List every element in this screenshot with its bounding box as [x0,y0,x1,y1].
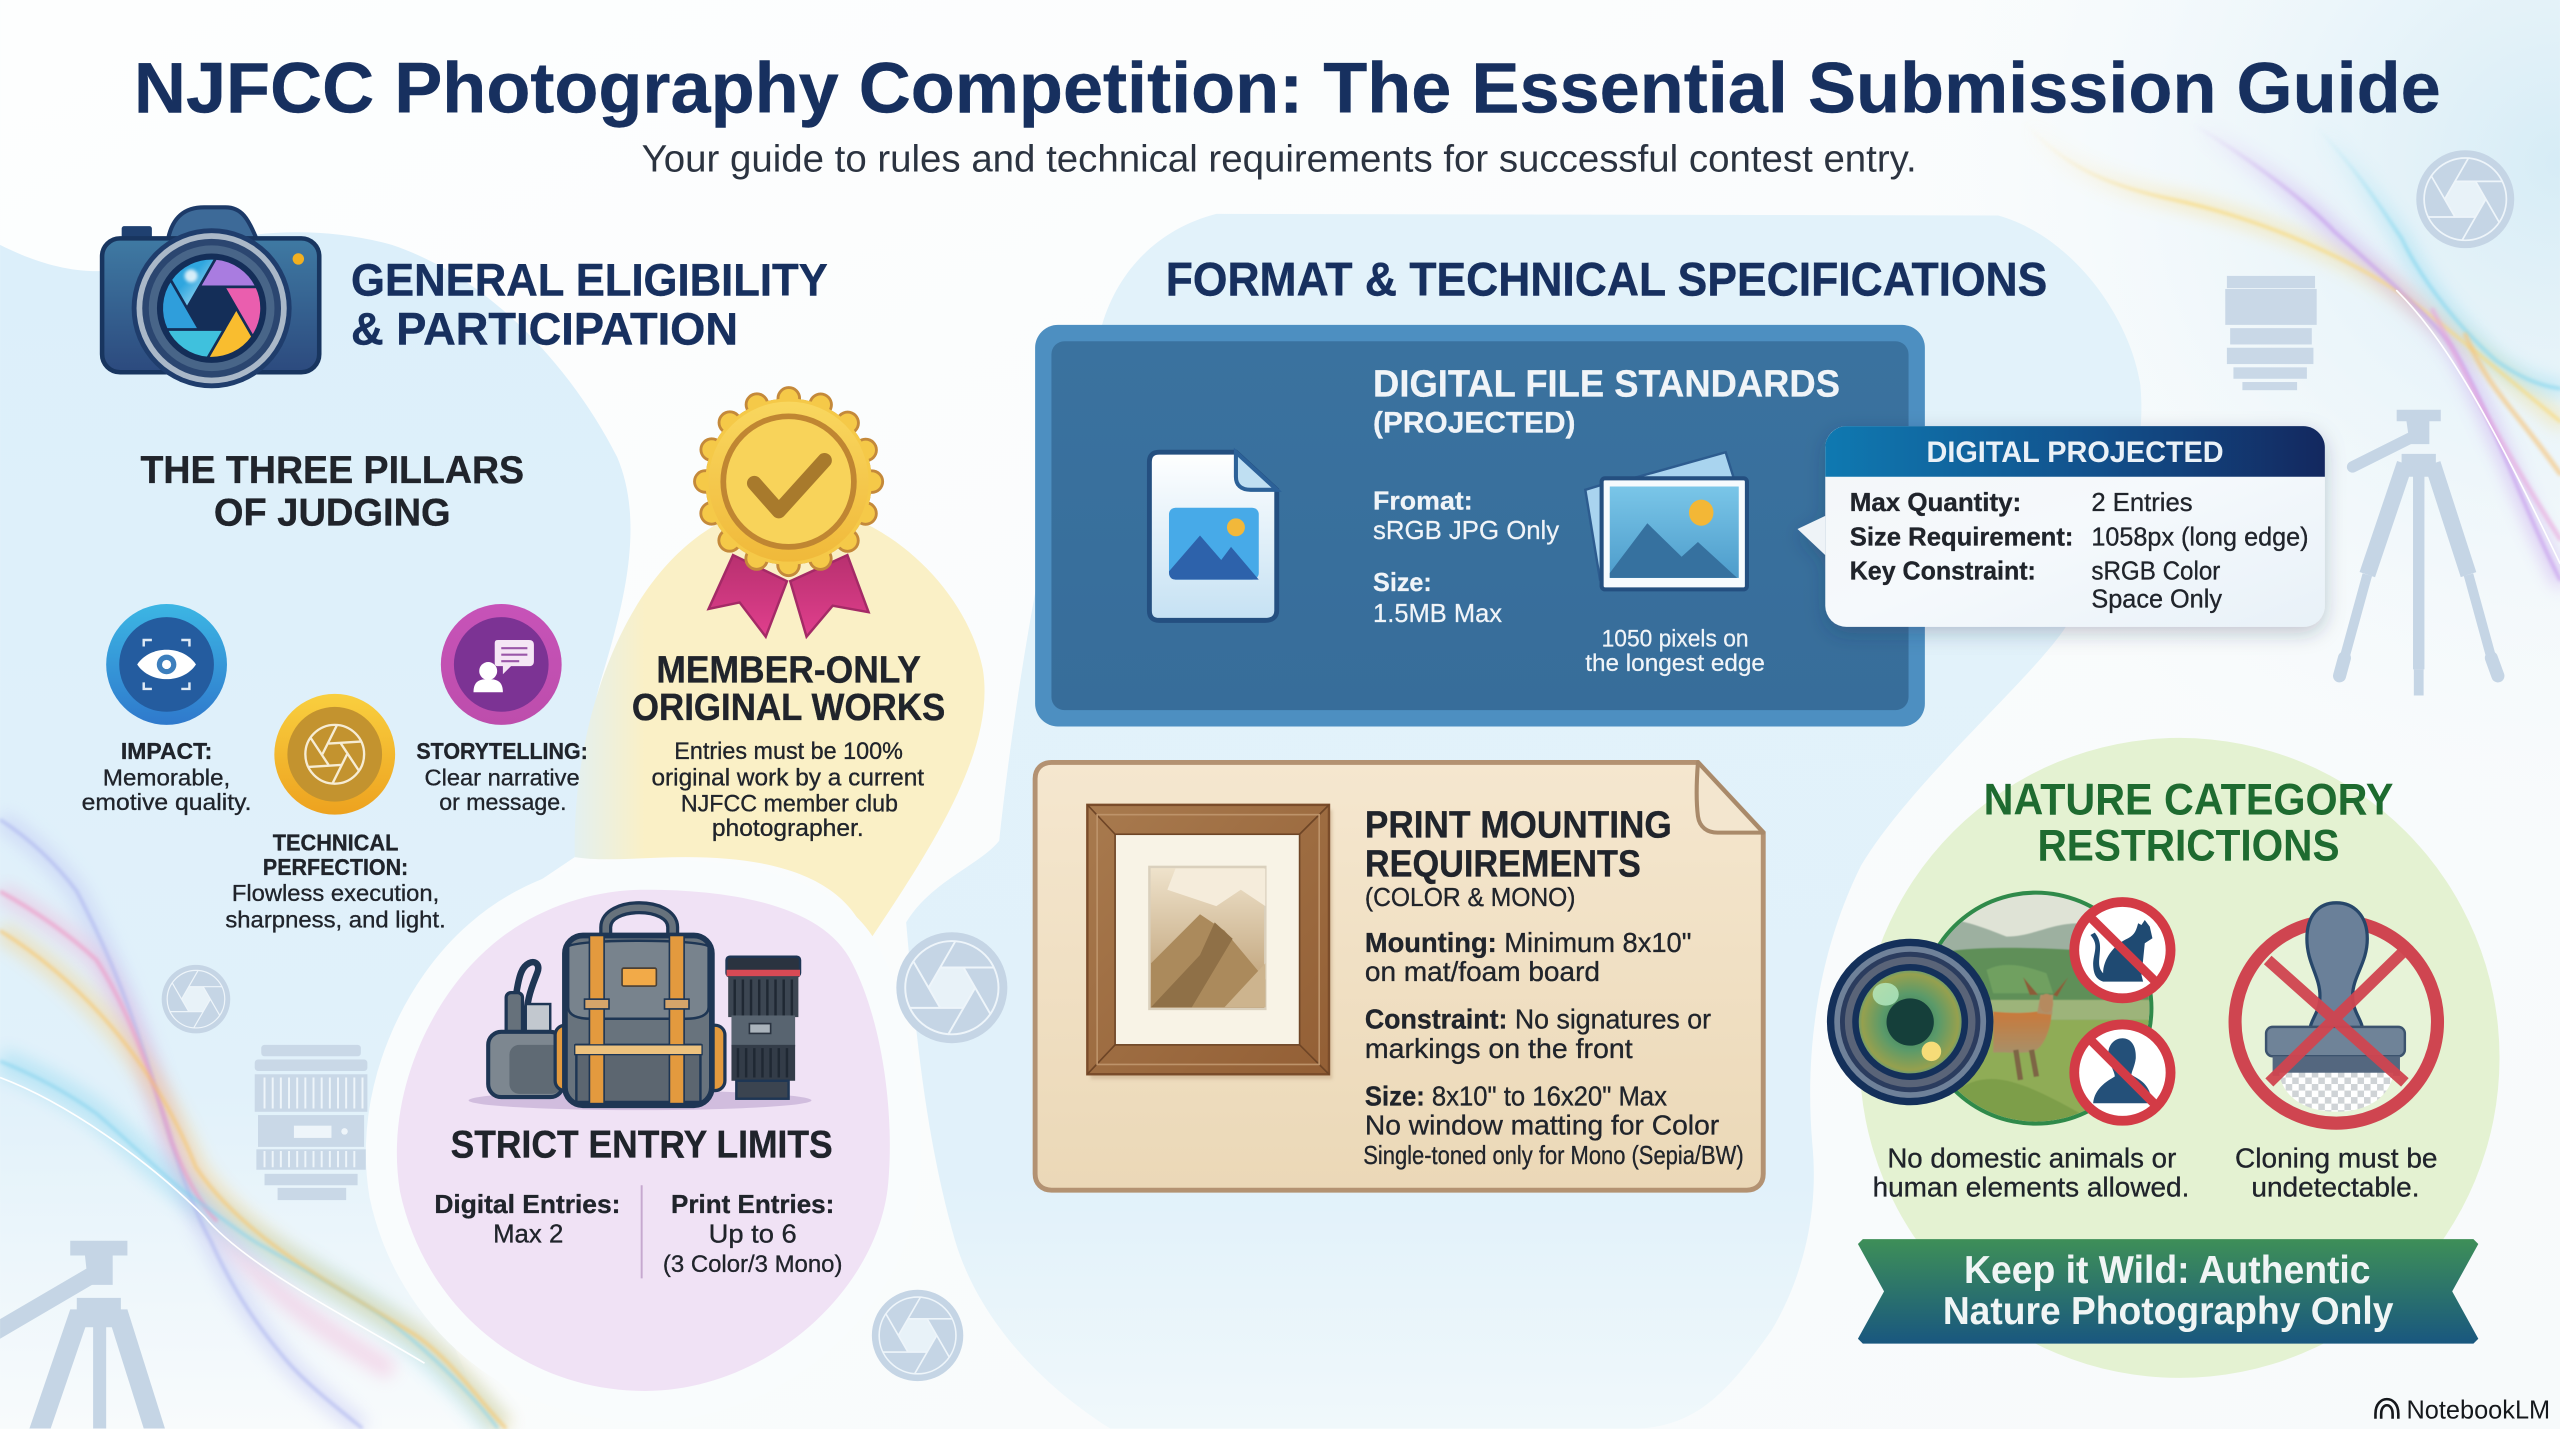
text: technical perfection: Flowless execution, [232,880,439,906]
text: no domestic animals [1873,1142,2189,1203]
heading: three pillars: THE THREE PILLARS [140,449,524,492]
callout table: Space Only [2091,583,2222,613]
text: member only original works: NJFCC member club [681,790,898,817]
text: storytelling: or message. [439,789,567,815]
watermark: tripod top right [2340,410,2498,695]
heading: nature category restrictions: RESTRICTIONS [2038,821,2340,870]
heading: three pillars [140,449,524,535]
light stream: bottom left [0,820,506,1429]
callout table: Size Requirement: [1850,521,2073,551]
text: pixel caption [1585,627,1765,677]
callout: digital projected [1798,426,2325,627]
icon: storytelling [441,604,562,725]
watermark: lens bottom left [255,1045,367,1200]
banner: keep it wild: Nature Photography Only [1943,1290,2394,1333]
text: storytelling: STORYTELLING: [416,738,588,764]
heading: nature category restrictions [1984,776,2393,870]
text: member only original works: MEMBER-ONLY [656,648,921,690]
heading: digital file standards [1373,363,1840,440]
icon: camera [102,207,319,388]
divider [641,1185,643,1278]
text: print rules: markings on the front [1365,1033,1633,1064]
text: print rules: on mat/foam board [1365,956,1600,987]
text: member only original works: photographer. [712,815,864,842]
text: format and size: 1.5MB Max [1373,598,1502,628]
icon: backpack and lens [469,908,811,1110]
heading: print mounting: (COLOR & MONO) [1365,882,1575,912]
text: pixel caption: 1050 pixels on [1602,627,1749,653]
watermark: aperture bottom [872,1290,963,1381]
text: digital entries [434,1189,620,1248]
text: format and size: sRGB JPG Only [1373,515,1559,545]
panel: centre blue blob [906,214,2141,1429]
callout table: 2 Entries [2091,487,2193,517]
icon: nature scene with deer [1938,890,2154,1126]
icon: no human elements [2074,1024,2171,1121]
icon: technical aperture [274,694,395,815]
text: digital entries: Max 2 [493,1218,563,1248]
callout table: Max Quantity: [1850,487,2021,517]
banner: keep it wild: Keep it Wild: Authentic [1964,1249,2371,1292]
heading: nature category restrictions: NATURE CATEGORY [1984,776,2393,825]
text: print rules: Mounting: Minimum 8x10" [1365,927,1691,958]
text: technical perfection [225,830,446,932]
text: no domestic animals: human elements allowed. [1873,1172,2189,1203]
heading: print mounting [1365,804,1672,912]
text: print rules: Constraint: No signatures or [1365,1004,1711,1035]
subtitle: Your guide to rules and technical requirements for successful contest entry. [642,137,1917,179]
heading: print mounting: REQUIREMENTS [1365,843,1641,885]
text: technical perfection: TECHNICAL [273,830,398,856]
heading: format and technical specifications: FORMAT & TECHNICAL SPECIFICATIONS [1166,253,2047,306]
panel: purple entry limits blob [397,890,890,1391]
panel: green nature blob [1860,738,2500,1378]
icon: framed photo [1087,805,1332,1079]
text: no domestic animals: No domestic animals or [1887,1142,2176,1173]
icon: photo stack [1585,452,1747,589]
callout table: 1058px (long edge) [2091,521,2309,551]
icon: camera lens [1827,939,1993,1105]
callout table [1850,487,2309,613]
text: member only original works: original work by a current [651,764,924,791]
text: print rules: No window matting for Color [1365,1110,1719,1141]
callout table: Key Constraint: [1850,556,2036,586]
callout header: DIGITAL PROJECTED [1927,436,2224,469]
heading: digital file standards: (PROJECTED) [1373,407,1575,440]
text: member only original works: ORIGINAL WORKS [632,686,945,728]
watermark: lens top right [2225,276,2317,390]
heading: general eligibility [351,254,828,354]
text: member only original works: Entries must be 100% [674,738,903,765]
icon: image file [1149,452,1277,620]
text: format and size: Fromat: [1373,485,1473,515]
text: storytelling: Clear narrative [425,764,580,790]
text: digital entries: Digital Entries: [434,1189,620,1219]
text: storytelling [416,738,588,815]
text: cloning: undetectable. [2251,1172,2420,1203]
title: NJFCC Photography Competition: The Essential Submission Guide [134,49,2441,129]
text: print entries: Print Entries: [671,1189,834,1219]
text: format and size [1373,485,1559,628]
text: cloning: Cloning must be [2235,1142,2438,1173]
text: pixel caption: the longest edge [1585,651,1765,677]
text: cloning [2235,1142,2438,1203]
banner: keep it wild [1858,1239,2478,1344]
text: print entries: Up to 6 [709,1218,797,1248]
watermark: tripod bottom left [0,1241,165,1429]
text: print rules [1363,927,1744,1170]
text: format and size: Size: [1373,567,1432,597]
text: print entries: (3 Color/3 Mono) [663,1251,842,1278]
heading: strict entry limits: STRICT ENTRY LIMITS [451,1124,833,1167]
text: impact: IMPACT: [121,738,212,764]
heading: general eligibility: & PARTICIPATION [351,303,738,354]
watermark: aperture top right [2416,150,2514,248]
text: print entries [663,1189,842,1278]
panel: digital file standards [1035,325,1925,726]
icon: no cloning stamp [2235,903,2438,1123]
panel: left blue blob [0,232,630,1429]
text: impact: emotive quality. [82,789,251,815]
heading: print mounting: PRINT MOUNTING [1365,804,1672,846]
icon: no domestic animals [2074,902,2171,998]
panel: print mounting requirements [1035,762,1763,1190]
heading: digital file standards: DIGITAL FILE STANDARDS [1373,363,1840,405]
icon: gold medal [705,398,872,637]
panel: yellow member blob [575,504,985,942]
text: impact [82,738,251,815]
logo: NotebookLM: NotebookLM [2406,1395,2550,1425]
text: impact: Memorable, [103,764,230,790]
heading: three pillars: OF JUDGING [214,492,451,535]
callout table: sRGB Color [2091,556,2221,586]
watermark: aperture centre [896,932,1007,1043]
text: print rules: Single-toned only for Mono (Sepia/BW) [1363,1140,1744,1170]
light stream: top right [2023,121,2560,580]
watermark: aperture left [162,965,230,1033]
icon: impact eye [106,604,227,725]
text: member only original works [632,648,945,842]
text: technical perfection: sharpness, and light. [225,906,446,932]
text: print rules: Size: 8x10" to 16x20" Max [1365,1080,1667,1111]
text: technical perfection: PERFECTION: [263,854,408,880]
heading: general eligibility: GENERAL ELIGIBILITY [351,254,828,305]
